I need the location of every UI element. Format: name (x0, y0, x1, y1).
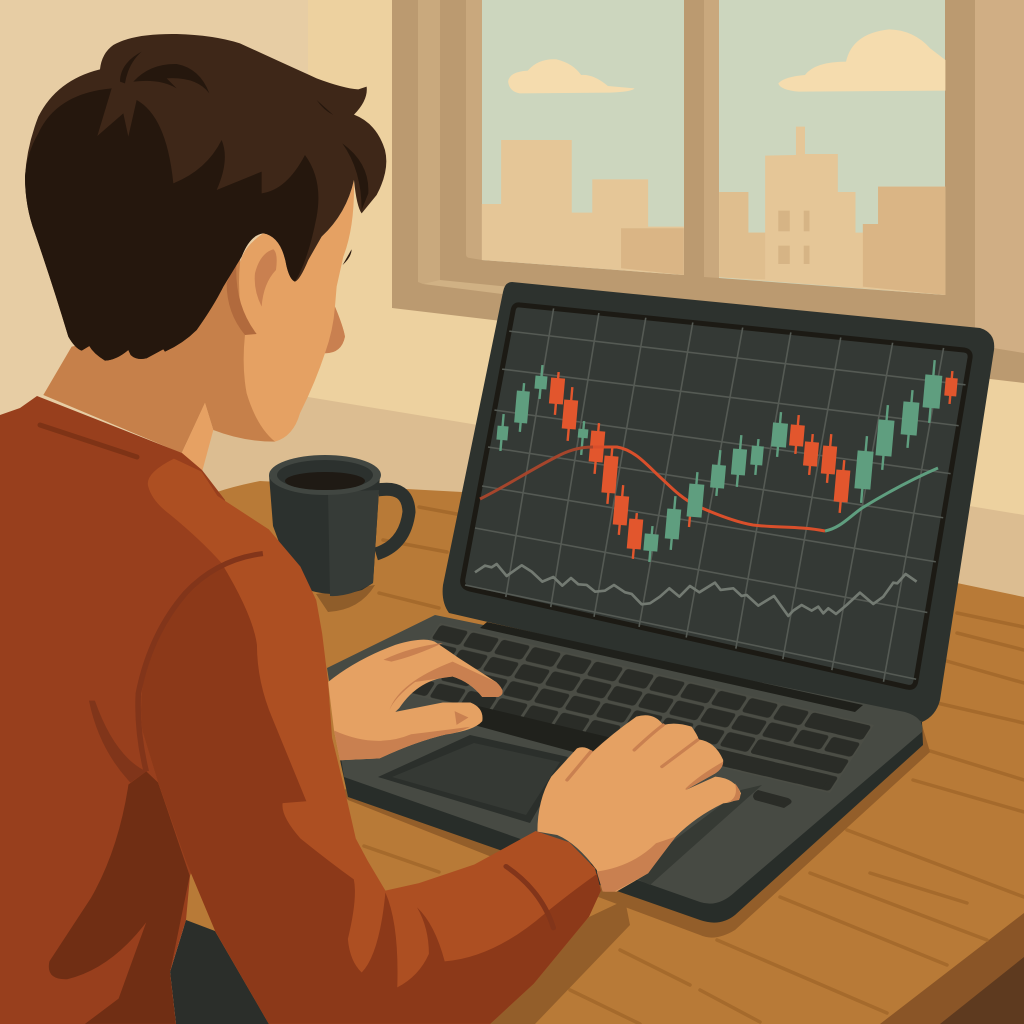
wood grain (364, 507, 1024, 1024)
person: neck and face (43, 180, 354, 473)
hair strands (120, 52, 368, 210)
red candles (548, 371, 958, 560)
right hand shading (597, 837, 676, 892)
coffee mug (269, 455, 409, 596)
laptop shadow (340, 725, 930, 938)
collar highlight (182, 403, 213, 473)
arm highlight (141, 459, 601, 1024)
trackpad (378, 735, 568, 823)
green candles (495, 359, 944, 563)
left hand (328, 640, 503, 760)
cuff seam (506, 866, 553, 928)
torso fold (89, 701, 146, 783)
base top (327, 615, 922, 904)
laptop lid (443, 282, 994, 722)
space bar band (474, 706, 612, 757)
mug shadow (316, 585, 375, 612)
skyline buildings (482, 127, 945, 295)
coffee (285, 472, 365, 490)
eye (343, 249, 352, 265)
moving average: rising green (825, 468, 938, 531)
arm shadow (141, 563, 601, 1024)
keyboard (396, 623, 874, 793)
window (392, 0, 1024, 383)
arrow key (753, 790, 792, 808)
table front edge (880, 913, 1024, 1024)
window pane: right sky (719, 0, 945, 295)
person: sweater details (49, 459, 601, 1024)
person: torso in sweater (0, 396, 250, 1024)
palm rest shadow (628, 785, 762, 885)
sleeve seam (138, 554, 263, 771)
neck (43, 257, 287, 453)
mug body (269, 475, 380, 594)
wide keys (804, 712, 871, 740)
mug handle (376, 489, 409, 554)
torso shadow (49, 771, 190, 1024)
shoulder crease (40, 425, 137, 457)
candle over moving average (687, 471, 705, 518)
face (239, 180, 354, 442)
window pane: left sky (482, 0, 684, 275)
moving average: muted left part (480, 447, 593, 499)
ear (255, 249, 277, 307)
clouds (508, 29, 945, 93)
right hand (537, 715, 741, 892)
screen (463, 305, 970, 687)
chart grid (465, 300, 967, 690)
laptop base (327, 615, 923, 923)
person: trousers (170, 920, 269, 1024)
nose shadow (325, 307, 345, 353)
person: hair (25, 34, 386, 361)
candlestick chart (495, 359, 958, 563)
hinge (480, 622, 863, 712)
hair shadow (25, 88, 318, 361)
indicator line (475, 564, 917, 616)
table (170, 481, 1024, 1024)
moving average: falling red (593, 447, 825, 531)
base underside (340, 722, 923, 923)
window frame (392, 0, 1024, 383)
left hand shading (334, 727, 470, 760)
sleeve shadow on table (490, 900, 630, 1024)
